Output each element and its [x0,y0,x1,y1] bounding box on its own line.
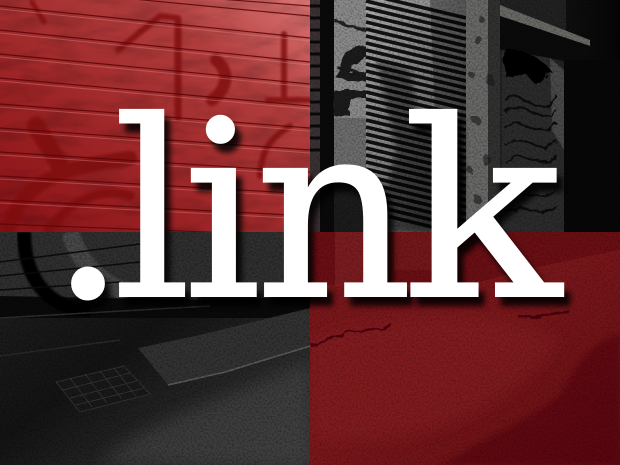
concrete column [466,0,501,232]
doorway darkness [564,62,568,232]
panel: red bottom-right road [310,232,620,465]
graffiti wall panel [333,0,366,168]
metal roller shutter with stripes [366,0,466,235]
dark road stain [440,335,620,465]
shutter slat lines [0,0,310,236]
title: .link: l [113,69,191,354]
panel: dark top-right alley wall [310,0,620,235]
wall base in red [310,232,620,285]
title: .link: i [183,69,261,354]
graffiti side wall and ledge [500,0,590,232]
graffiti shapes on the red shutter [8,2,310,232]
title shadow: .link: n [261,78,419,363]
title shadow: .link [55,78,570,363]
title: .link: . [49,69,127,354]
title: .link [49,69,564,354]
pole and shutter sliver [310,0,334,232]
title shadow: .link: k [408,78,570,363]
paving slab and kerb [138,308,310,385]
title: .link: n [255,69,413,354]
title shadow: .link: . [55,78,133,363]
title shadow: .link: i [189,78,267,363]
title shadow: .link: l [119,78,197,363]
kerb edges [0,306,210,356]
cracks [310,312,570,345]
drain grate [56,366,150,412]
panel: red top-left shutter [0,0,310,236]
shutter base in grey [0,232,284,300]
title: .link: k [402,69,564,354]
road surface light [110,369,310,465]
panel: dark bottom-left pavement [0,232,310,465]
